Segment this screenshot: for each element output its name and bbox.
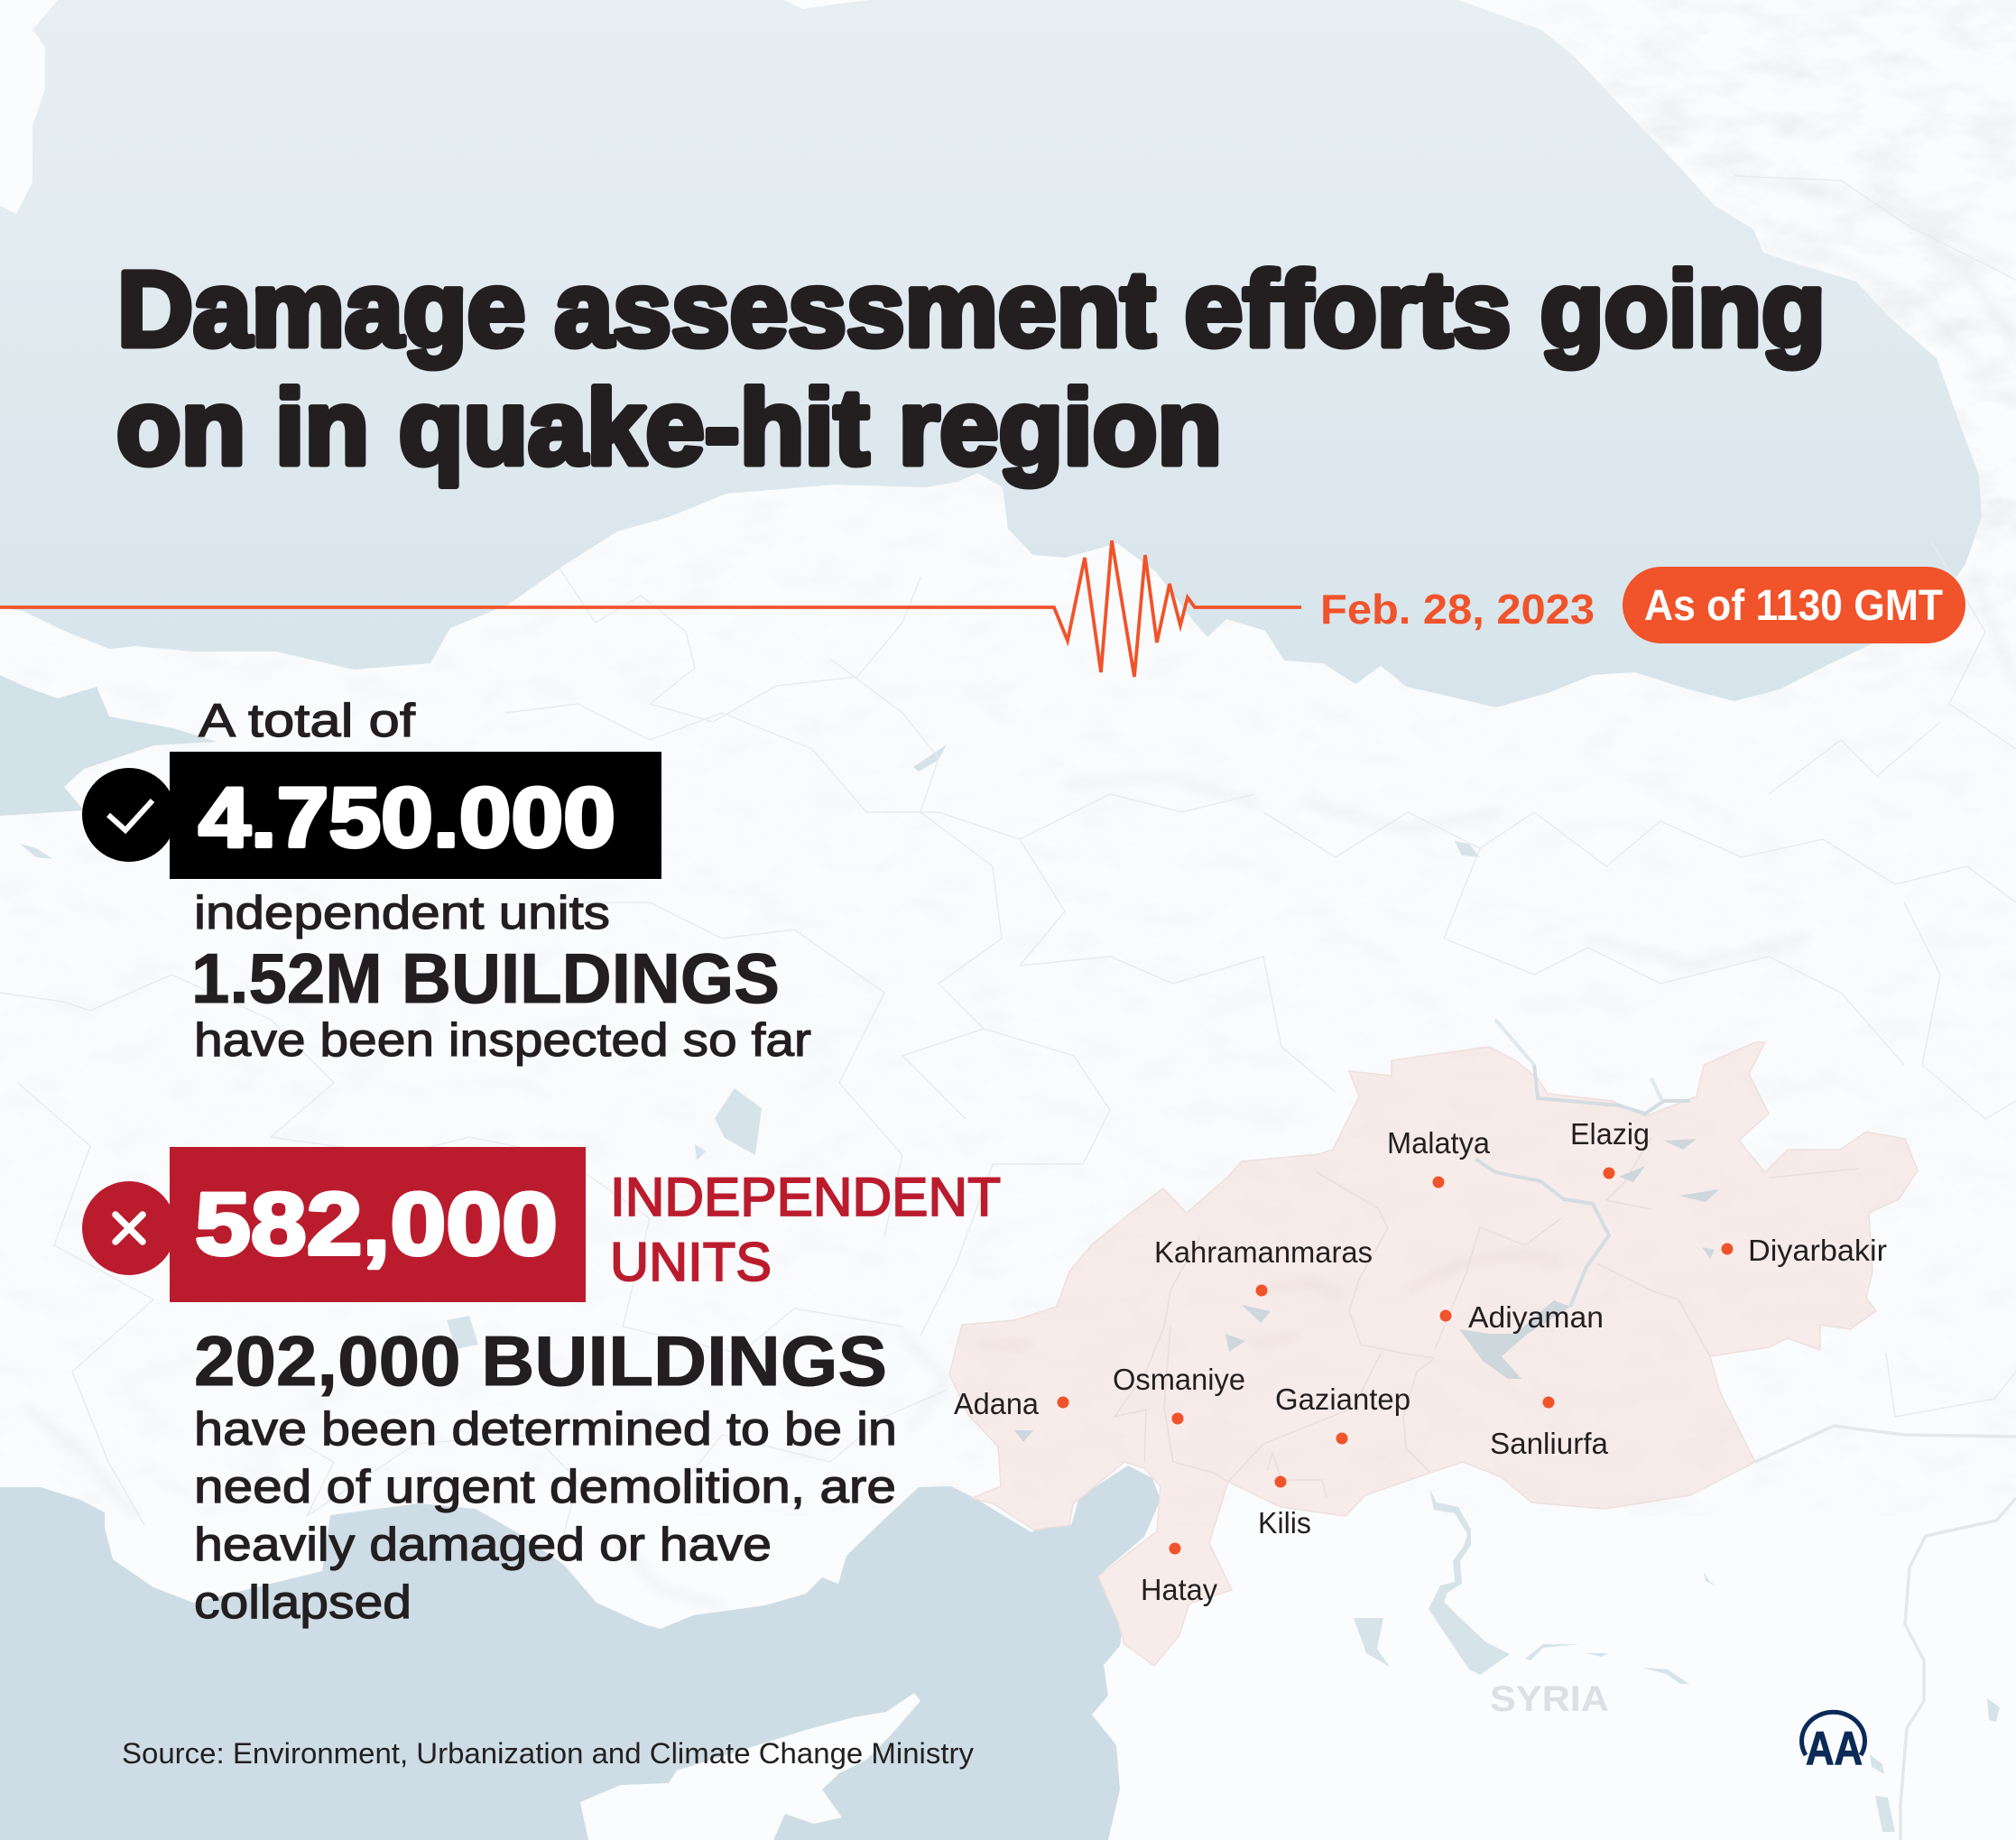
number box: damaged: 582,000	[195, 1174, 558, 1273]
Black Sea	[0, 0, 1982, 707]
text: demolition description	[194, 1403, 897, 1629]
text: inspected so far: have been inspected so far	[194, 1014, 811, 1067]
number box: damaged	[170, 1147, 586, 1302]
city labels: Malatya	[1387, 1126, 1491, 1160]
city labels: Hatay	[1141, 1573, 1217, 1606]
text: independent units: independent units	[194, 887, 610, 939]
text: independent units in red	[610, 1167, 1001, 1292]
city labels	[954, 1117, 1887, 1606]
source: Source: Environment, Urbanization and Climate Change Ministry	[122, 1737, 974, 1770]
city labels: Gaziantep	[1275, 1382, 1410, 1416]
title: on in quake-hit region	[116, 368, 1222, 487]
seismograph line	[0, 541, 1301, 677]
province and national borders	[0, 176, 2016, 1552]
city labels: Elazig	[1570, 1117, 1650, 1151]
title: Damage assessment efforts going	[117, 250, 1826, 369]
title	[116, 250, 1826, 487]
text: buildings inspected: 1.52M BUILDINGS	[191, 938, 780, 1018]
panel: affected provinces map	[939, 1020, 1931, 1666]
Syria border	[1755, 1426, 2016, 1840]
Cyprus	[580, 1693, 920, 1840]
city labels: Kahramanmaras	[1154, 1235, 1373, 1269]
panel: damaged units	[82, 1147, 1001, 1629]
Sea of Marmara	[0, 675, 217, 816]
panel: inspected units	[82, 695, 811, 1067]
northern shore sliver	[783, 0, 871, 9]
date: Feb. 28, 2023	[1320, 586, 1595, 633]
city labels: Adana	[954, 1387, 1040, 1420]
icon: check mark	[82, 768, 176, 862]
number box: inspected: 4.750.000	[199, 770, 615, 865]
text: independent units in red: UNITS	[610, 1232, 772, 1292]
text: demolition description: collapsed	[194, 1576, 412, 1629]
affected region shape	[949, 1042, 1918, 1666]
logo: Anadolu Agency	[1801, 1712, 1864, 1775]
logo: Anadolu Agency: AA	[1806, 1723, 1863, 1775]
city labels: Sanliurfa	[1490, 1427, 1609, 1460]
city labels: Osmaniye	[1113, 1363, 1245, 1396]
SYRIA label: SYRIA	[1490, 1679, 1609, 1719]
city markers	[1058, 1168, 1733, 1554]
city labels: Adiyaman	[1468, 1300, 1604, 1334]
time badge: As of 1130 GMT	[1644, 582, 1943, 630]
city labels: Kilis	[1258, 1506, 1311, 1539]
time badge	[1623, 567, 1965, 643]
text: independent units in red: INDEPENDENT	[610, 1167, 1001, 1227]
shaded relief	[994, 1253, 1540, 1346]
icon: cross	[82, 1181, 176, 1275]
text: demolition description: need of urgent demolition, are	[194, 1461, 896, 1513]
city labels: Diyarbakir	[1748, 1234, 1887, 1267]
reservoirs and rivers	[1014, 1139, 1719, 1442]
text: buildings demolition: 202,000 BUILDINGS	[194, 1321, 887, 1401]
text: demolition description: heavily damaged or have	[194, 1519, 772, 1571]
text: a total of: A total of	[199, 695, 416, 747]
Mediterranean Sea	[0, 1466, 1161, 1840]
number box: inspected	[170, 752, 661, 879]
text: demolition description: have been determined to be in	[194, 1403, 897, 1456]
land lakes	[20, 744, 2000, 1832]
province borders	[1114, 1137, 1859, 1498]
